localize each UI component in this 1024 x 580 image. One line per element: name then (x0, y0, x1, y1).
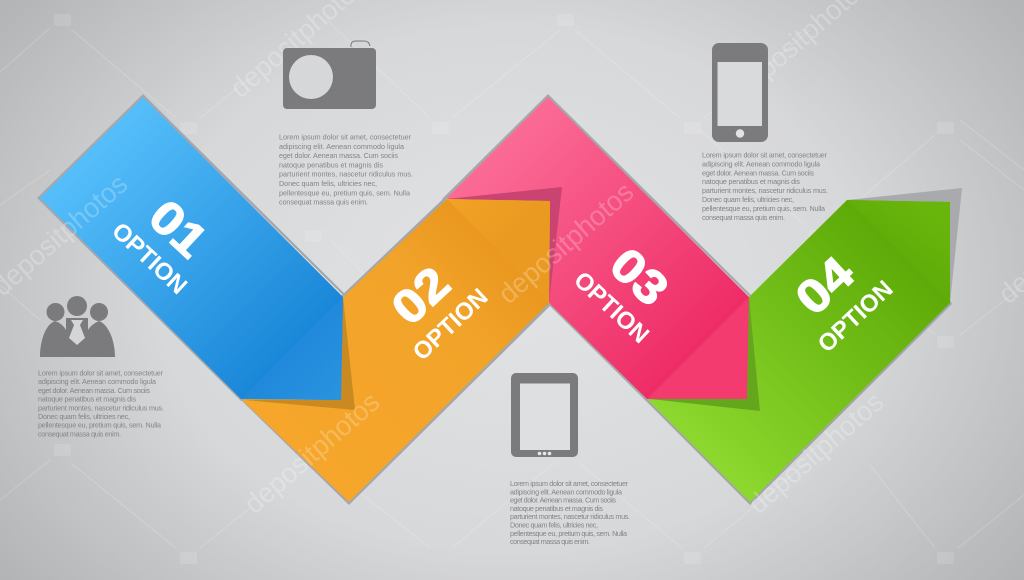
text block: camera: Lorem ipsum dolor sit amet, consectetuer (279, 132, 412, 142)
label 04 (785, 246, 899, 358)
label 02 (381, 256, 494, 366)
text block: people: consequat massa quis enim. (38, 429, 121, 438)
label 03 (568, 237, 679, 349)
text block: camera: pellentesque eu, pretium quis, sem. Nulla (279, 188, 410, 197)
ribbon edge upper (341, 198, 447, 299)
ribbon edge (37, 94, 346, 401)
ribbon edge (644, 300, 952, 505)
green body (647, 200, 950, 502)
option text: OPTION (106, 217, 192, 300)
option text: OPTION (408, 283, 494, 366)
icon: phone (712, 43, 768, 142)
ribbon edge lower (549, 301, 650, 401)
text block: tablet (510, 479, 630, 546)
blue body (40, 97, 343, 400)
text block: people: Donec quam felis, ultricies nec, (38, 412, 130, 421)
option text: OPTION (568, 266, 654, 349)
text block: people: Lorem ipsum dolor sit amet, consectetuer (38, 368, 164, 378)
blue shadow on orange (245, 297, 355, 410)
text block: tablet: consequat massa quis enim. (510, 537, 590, 546)
text block: camera: adipiscing elit. Aenean commodo ligula (279, 142, 404, 151)
text block: camera: Donec quam felis, ultricies nec, (279, 179, 377, 188)
text block: tablet: Lorem ipsum dolor sit amet, consectetuer (510, 479, 629, 488)
text block: tablet: adipiscing elit. Aenean commodo ligula (510, 487, 622, 496)
text block: phone: Lorem ipsum dolor sit amet, consectetuer (702, 150, 828, 160)
orange shadow on pink (447, 187, 562, 303)
icon: people (40, 296, 115, 357)
text block: phone: natoque penatibus et magnis dis (702, 177, 800, 186)
text block: phone: eget dolor. Aenean massa. Cum sociis (702, 168, 814, 177)
number 03: 03 (600, 237, 679, 316)
icon: tablet (511, 373, 578, 457)
text block: camera: natoque penatibus et magnis dis (279, 160, 383, 169)
text block: phone: consequat massa quis enim. (702, 213, 785, 222)
watermark text: depositphotos (742, 386, 889, 520)
text block: people: natoque penatibus et magnis dis (38, 395, 136, 404)
blue fold (241, 297, 343, 400)
pink fold (647, 297, 749, 399)
number 04: 04 (785, 246, 864, 325)
text block: camera (279, 132, 413, 207)
number 01: 01 (139, 189, 218, 268)
ribbon 04 green (644, 188, 962, 505)
text block: people (38, 368, 164, 438)
orange fold (447, 199, 550, 303)
pink shadow on green (650, 297, 760, 411)
text block: tablet: eget dolor. Aenean massa. Cum sociis (510, 496, 616, 505)
text block: tablet: Donec quam felis, ultricies nec, (510, 520, 598, 530)
text block: phone: Donec quam felis, ultricies nec, (702, 195, 794, 204)
text block: camera: eget dolor. Aenean massa. Cum sociis (279, 151, 398, 160)
cast shadow behind tip (847, 188, 962, 303)
text block: phone (702, 150, 828, 222)
ribbon 02 orange (240, 187, 562, 505)
number 02: 02 (381, 256, 460, 335)
watermark text: depositphotos (492, 176, 639, 310)
text block: people: eget dolor. Aenean massa. Cum sociis (38, 386, 150, 395)
text block: tablet: natoque penatibus et magnis dis (510, 504, 603, 513)
icon: camera (283, 41, 376, 109)
text block: people: pellentesque eu, pretium quis, sem. Nulla (38, 421, 161, 430)
text block: camera: parturient montes, nascetur ridiculus mus. (279, 170, 413, 179)
text block: phone: parturient montes, nascetur ridiculus mus. (702, 186, 828, 195)
text block: tablet: parturient montes, nascetur ridiculus mus. (510, 512, 630, 521)
label 01 (106, 189, 218, 300)
ribbon edge (442, 94, 751, 297)
text block: phone: pellentesque eu, pretium quis, sem. Nulla (702, 204, 825, 213)
text block: people: parturient montes, nascetur ridiculus mus. (38, 403, 164, 412)
green fold (847, 200, 950, 303)
orange body (241, 199, 550, 502)
watermark text: depositphotos (238, 386, 385, 520)
text block: phone: adipiscing elit. Aenean commodo ligula (702, 159, 820, 168)
text block: people: adipiscing elit. Aenean commodo ligula (38, 377, 156, 386)
ribbon 01 blue (37, 94, 346, 401)
ribbon 03 pink (442, 94, 760, 411)
ribbon edge (240, 302, 551, 505)
option text: OPTION (813, 275, 899, 358)
pink body (447, 97, 749, 399)
text block: camera: consequat massa quis enim. (279, 198, 368, 207)
text block: tablet: pellentesque eu, pretium quis, sem. Nulla (510, 529, 627, 538)
